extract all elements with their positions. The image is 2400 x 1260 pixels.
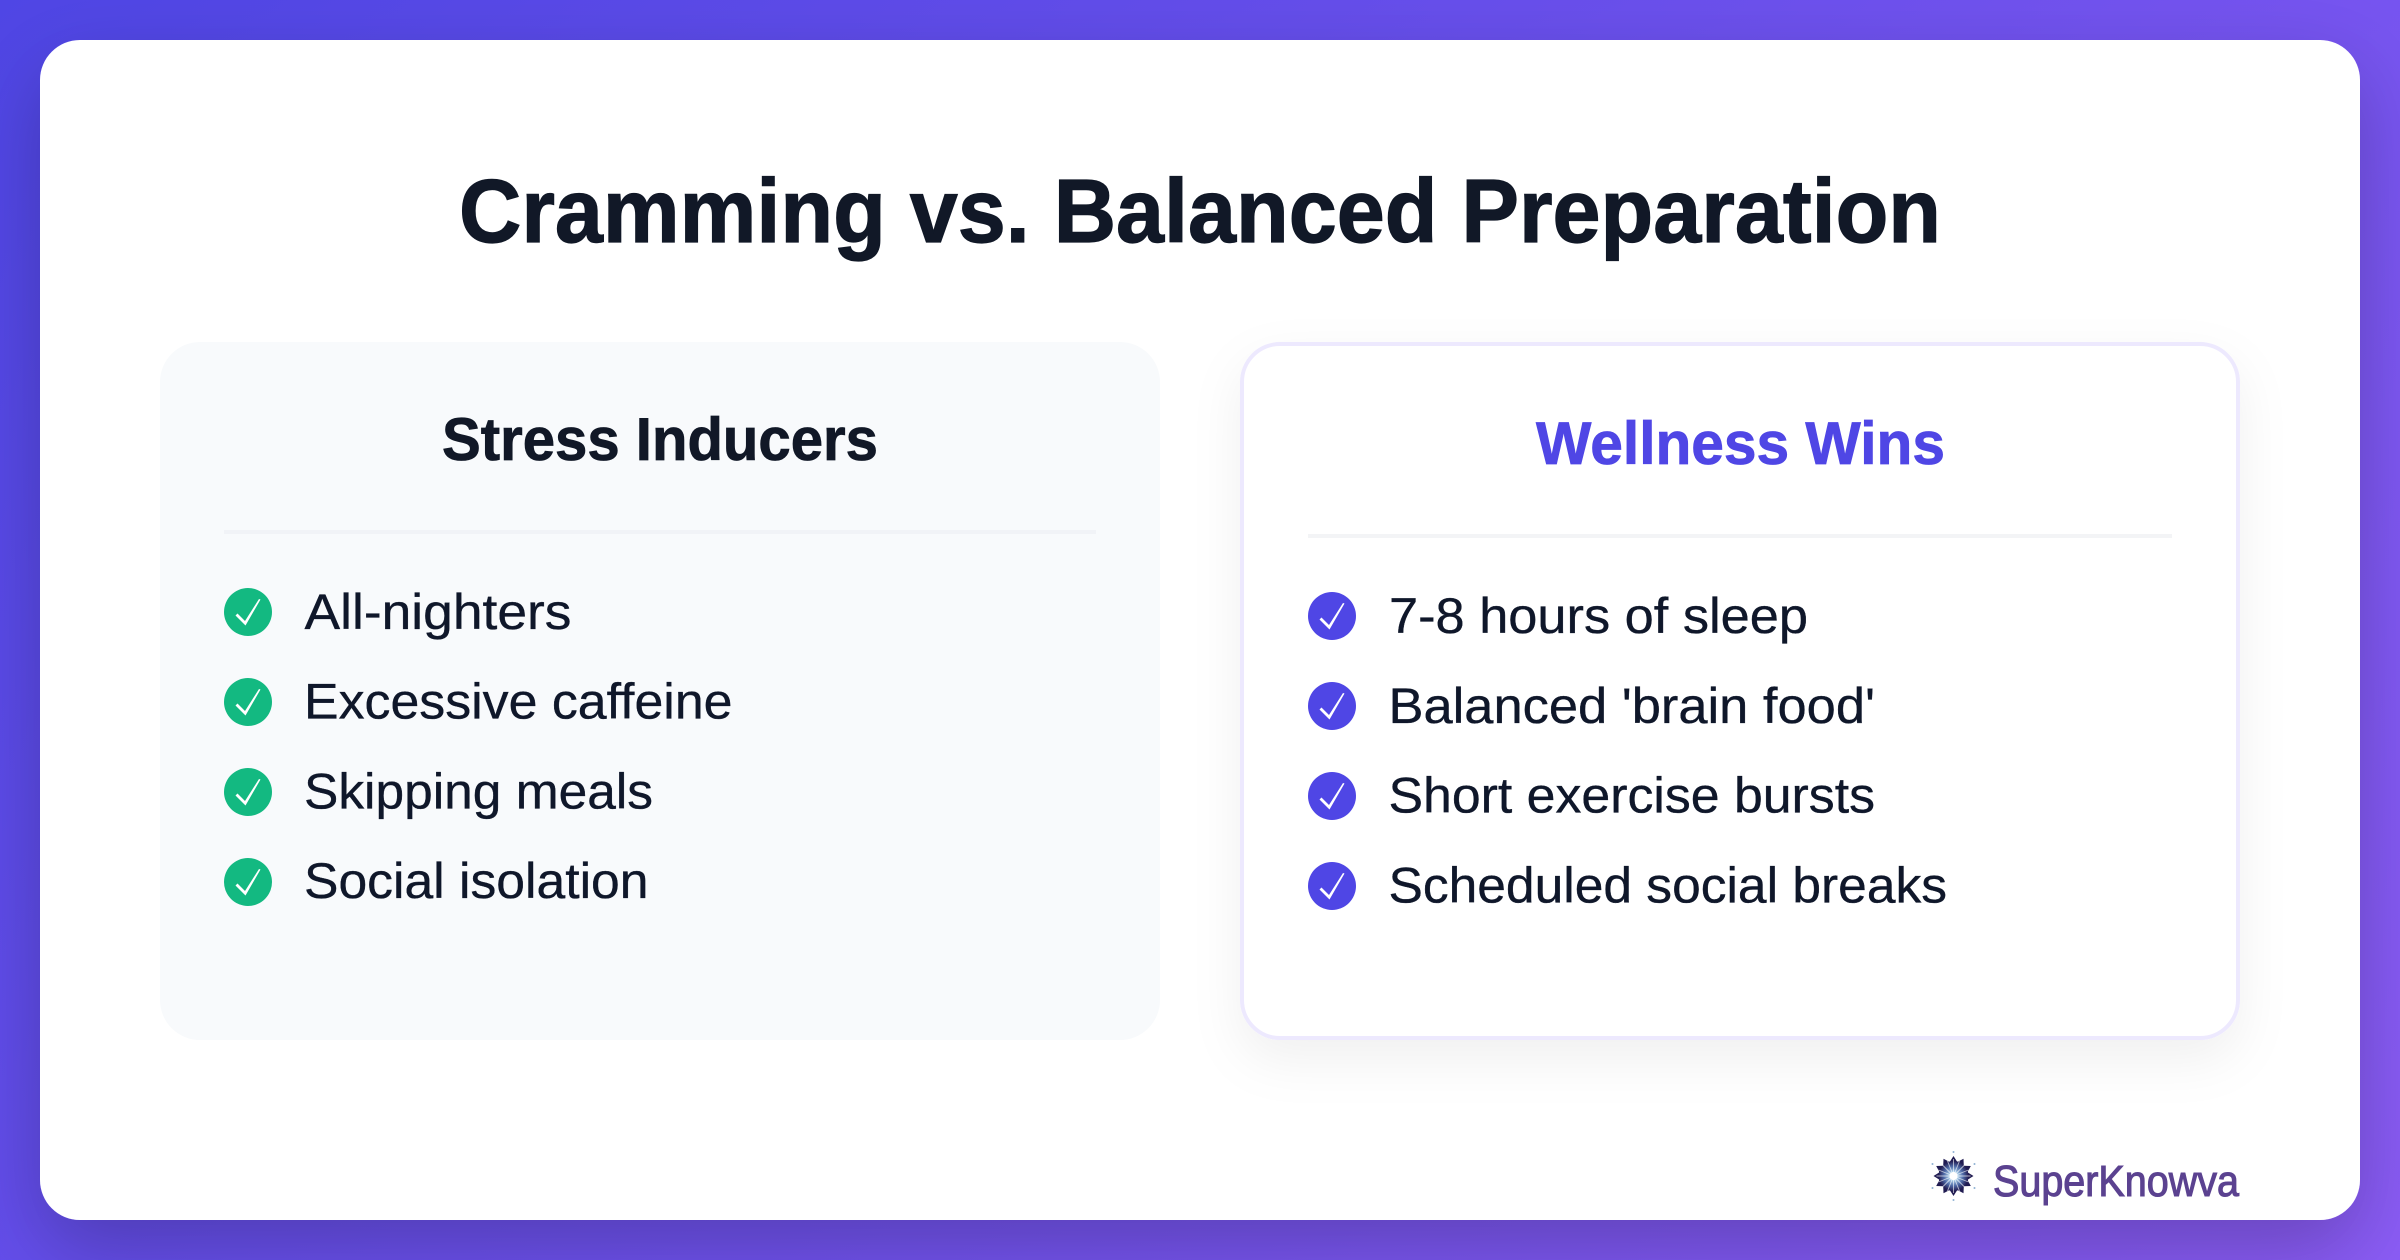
list item: social breaks xyxy=(1308,858,1947,914)
panel background xyxy=(160,342,1160,1040)
title: Cramming vs. Balanced Preparation xyxy=(459,162,1941,262)
label: Short exercise bursts xyxy=(1388,768,1875,824)
icon: green check xyxy=(224,768,272,816)
icon: green check xyxy=(224,678,272,726)
icon: starburst xyxy=(1932,1151,1976,1201)
brand logo xyxy=(1932,1151,2239,1206)
list item: brain food xyxy=(1308,678,1875,734)
panel: stress inducers xyxy=(160,342,1160,1040)
label: Scheduled social breaks xyxy=(1388,858,1947,914)
panel background xyxy=(1242,344,2238,1038)
label: Balanced 'brain food' xyxy=(1388,678,1875,734)
list item: social isolation xyxy=(224,853,648,909)
icon: indigo check xyxy=(1308,682,1356,730)
list item: sleep xyxy=(1308,588,1808,644)
icon: green check xyxy=(224,858,272,906)
label: Excessive caffeine xyxy=(304,674,732,730)
list item: excessive caffeine xyxy=(224,674,732,730)
heading: wellness wins: Wellness Wins xyxy=(1536,410,1945,477)
list item: all-nighters xyxy=(224,584,572,640)
icon: indigo check xyxy=(1308,862,1356,910)
panel: wellness wins xyxy=(1242,344,2238,1038)
list item: skipping meals xyxy=(224,764,653,820)
label: Skipping meals xyxy=(304,764,653,820)
label: All-nighters xyxy=(304,584,572,640)
heading: stress inducers: Stress Inducers xyxy=(442,406,878,473)
label: Social isolation xyxy=(304,853,648,909)
brand name: SuperKnowva xyxy=(1993,1157,2239,1206)
label: 7-8 hours of sleep xyxy=(1389,588,1808,644)
list item: exercise xyxy=(1308,768,1875,824)
icon: indigo check xyxy=(1308,592,1356,640)
icon: indigo check xyxy=(1308,772,1356,820)
icon: green check xyxy=(224,588,272,636)
